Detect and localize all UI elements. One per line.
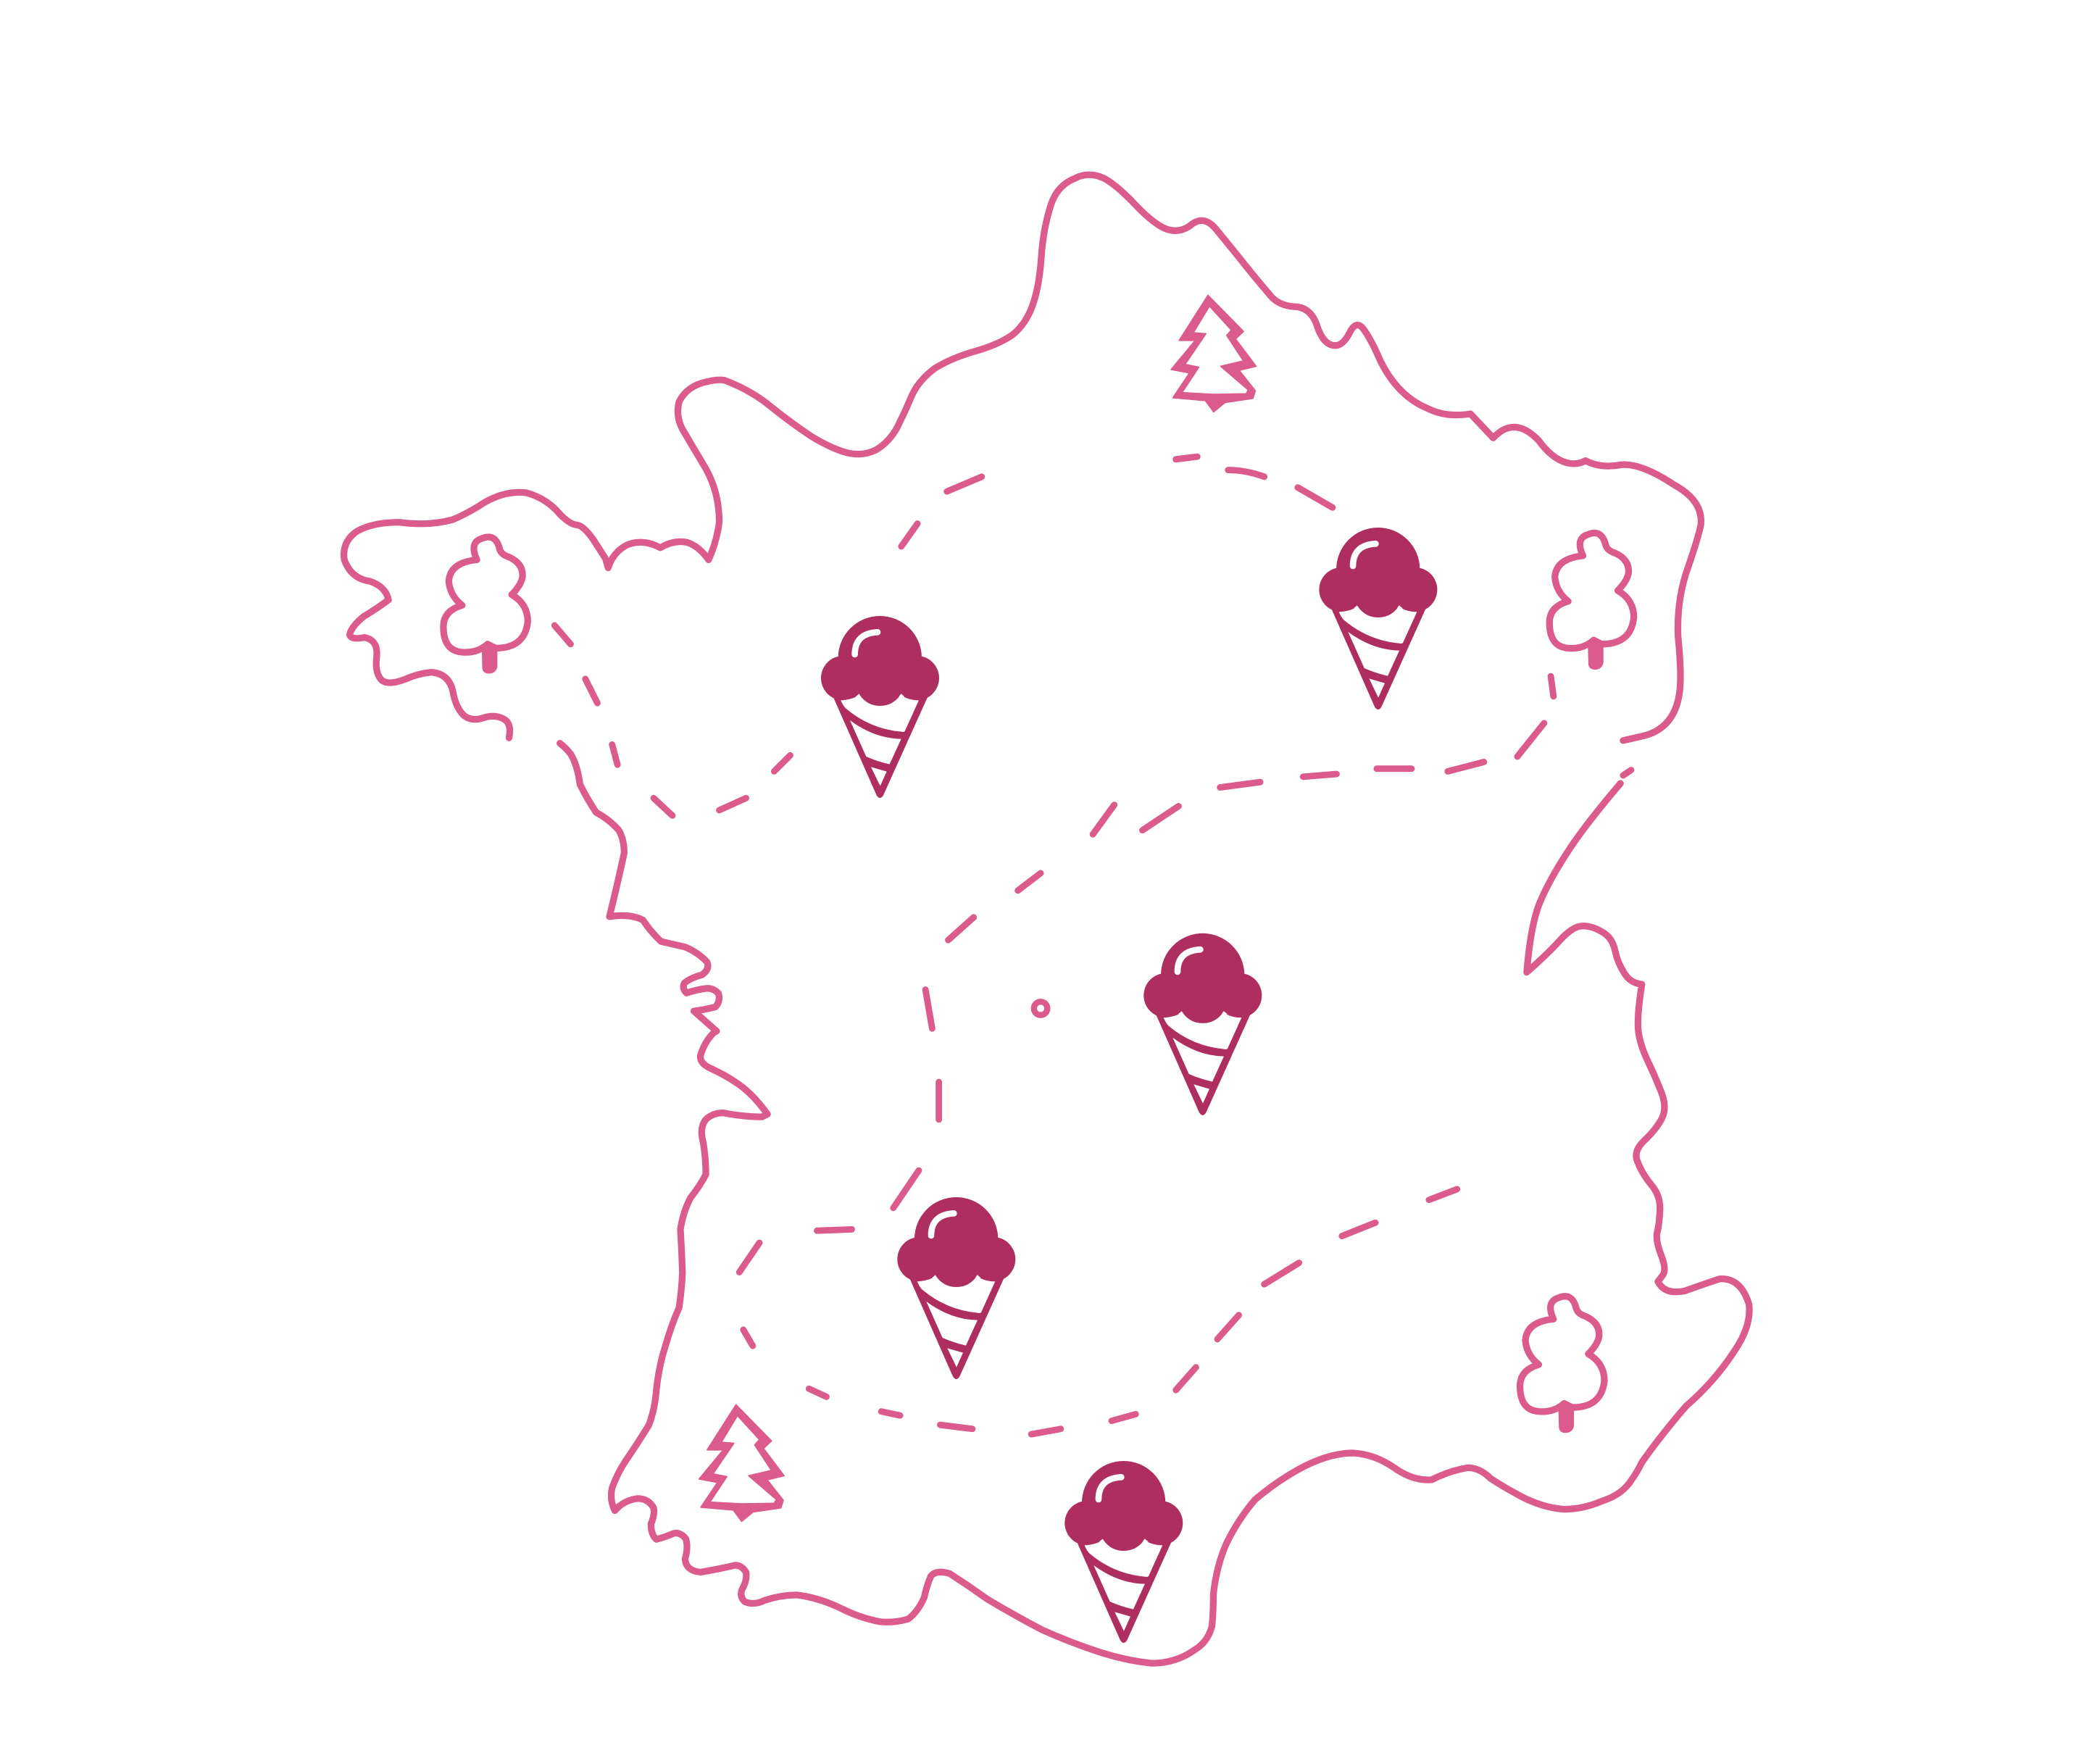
icon: tree, north-east	[1549, 533, 1634, 670]
icon: pine tree, north	[1171, 295, 1256, 412]
country outline: east, south and west coast	[560, 744, 1749, 1663]
country outline: north and east coast	[344, 175, 1701, 741]
small ring marker	[1034, 1002, 1047, 1015]
icon: pine tree, south-west	[699, 1404, 784, 1521]
icon: ice cream cone, west	[821, 616, 939, 798]
dashed route	[554, 457, 1631, 1434]
icon: tree, north-west	[443, 537, 528, 673]
icon: ice cream cone, south-west	[897, 1197, 1015, 1379]
icon: ice cream cone, north-east	[1319, 528, 1437, 709]
icon: tree, south-east	[1520, 1296, 1604, 1433]
icon: ice cream cone, south	[1064, 1461, 1183, 1643]
icon: ice cream cone, centre	[1143, 933, 1262, 1115]
